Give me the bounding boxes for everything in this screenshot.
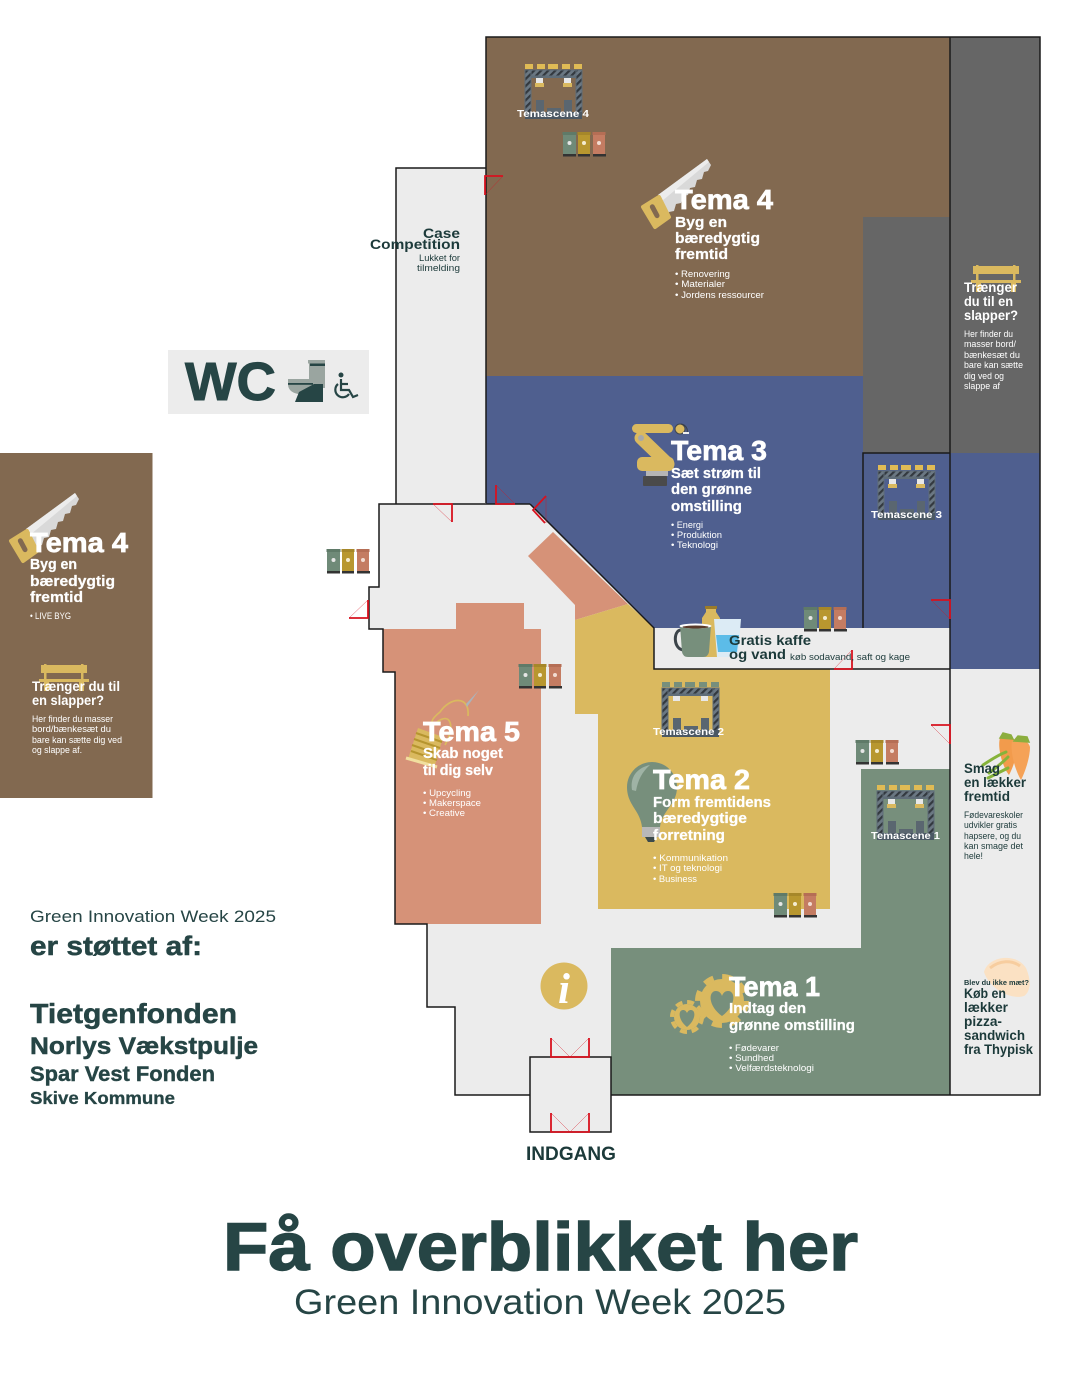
text block: sponsors <box>30 907 276 1108</box>
text block: case competition: Lukket for <box>419 253 460 263</box>
text block: tema 3: Tema 3 <box>671 435 767 466</box>
stage: temascene 3 <box>871 465 942 521</box>
doors <box>349 176 950 1132</box>
text block: tema 4: Tema 4 <box>675 184 773 215</box>
text block: pizza: pizza- <box>964 1014 1002 1029</box>
subtitle: Green Innovation Week 2025 <box>294 1283 786 1322</box>
text block: tema 2: bæredygtige <box>653 810 747 827</box>
text block: rest area right <box>964 280 1023 391</box>
text block: sponsors: Norlys Vækstpulje <box>30 1033 258 1060</box>
stage: temascene 4 <box>517 64 589 120</box>
text block: rest area side: Trænger du til <box>32 679 120 694</box>
icon: info circle <box>540 962 588 1013</box>
text block: free coffee <box>729 633 910 663</box>
icon: waste bins tema 2 <box>774 893 817 918</box>
text block: tema 5: Tema 5 <box>423 716 520 747</box>
text block: tema 2: Form fremtidens <box>653 794 771 811</box>
text block: tema 4 side: Tema 4 <box>30 527 128 558</box>
text block: rest area right: Trænger <box>964 280 1018 295</box>
text block: free coffee: køb sodavand, saft og kage <box>790 652 910 663</box>
text block: sponsors: Spar Vest Fonden <box>30 1063 215 1086</box>
text block: tema 1: • Sundhed <box>729 1053 774 1064</box>
text block: taste: Smag <box>964 761 1000 776</box>
text block: taste <box>964 761 1027 861</box>
text block: rest area right: bænkesæt du <box>964 350 1020 360</box>
panel: hall and corridors <box>369 168 1040 1132</box>
icon: gears with hearts <box>672 977 746 1032</box>
icon: robot arm <box>632 424 689 486</box>
text block: tema 4: • Materialer <box>675 279 725 290</box>
text block: taste: hele! <box>964 851 983 861</box>
text block: case competition: Case <box>423 226 461 241</box>
building walls <box>369 37 1040 1132</box>
panel: tema 5 diagonal extension <box>528 532 628 620</box>
stage: temascene 4: Temascene 4 <box>517 108 589 120</box>
text block: pizza: Blev du ikke mæt? <box>964 978 1029 987</box>
text block: tema 4 side: bæredygtig <box>30 573 115 590</box>
text block: rest area side: og slappe af. <box>32 745 82 755</box>
panel: grey rest area <box>863 37 1040 453</box>
text block: tema 2: • Kommunikation <box>653 853 728 864</box>
text block: tema 4: • Renovering <box>675 269 730 280</box>
text block: tema 4: • Jordens ressourcer <box>675 290 764 301</box>
text block: free coffee: Gratis kaffe <box>729 633 812 648</box>
text block: tema 5: • Makerspace <box>423 798 481 809</box>
text block: case competition <box>370 226 461 273</box>
icon: saw <box>643 159 711 227</box>
text block: tema 4: Byg en <box>675 214 727 231</box>
stage: temascene 1: Temascene 1 <box>871 830 940 842</box>
text block: rest area right: du til en <box>964 294 1013 309</box>
text block: rest area right: slapper? <box>964 308 1018 323</box>
text block: pizza: fra Thypisk <box>964 1042 1033 1057</box>
icon: waste bins outside <box>326 549 370 574</box>
panel: WC sign: WC <box>185 352 276 412</box>
text block: tema 3: • Teknologi <box>671 540 718 551</box>
icon: waste bins hall <box>856 740 899 764</box>
icon: thread spool and needle <box>406 690 479 767</box>
text block: tema 2: Tema 2 <box>653 764 750 795</box>
text block: case competition: Competition <box>370 237 460 252</box>
icon: coffee mug, bottle and water glass <box>675 606 741 657</box>
icon: waste bins coffee <box>804 607 847 632</box>
text block: tema 4 side: Byg en <box>30 556 77 573</box>
text block: taste: hapsere, og du <box>964 831 1021 841</box>
icon: wheelchair <box>335 372 358 397</box>
text block: tema 4: bæredygtig <box>675 230 760 247</box>
text block: pizza: Køb en <box>964 986 1006 1001</box>
text block: pizza <box>964 978 1033 1057</box>
icon: bench right <box>971 265 1021 292</box>
panel: tema 4 side card <box>0 453 152 798</box>
text block: tema 4 side: • LIVE BYG <box>30 611 71 621</box>
text block: tema 5: • Upcycling <box>423 788 471 799</box>
icon: bench side <box>39 664 89 691</box>
panel: tema 3 zone <box>486 376 1040 669</box>
text block: tema 1 <box>729 971 855 1074</box>
title: Få overblikket her <box>223 1209 858 1285</box>
text block: taste: udvikler gratis <box>964 820 1017 830</box>
text block: case competition: tilmelding <box>417 263 460 273</box>
text block: tema 2: • Business <box>653 874 697 885</box>
text block: rest area right: slappe af <box>964 381 1000 391</box>
stage: temascene 2 <box>653 682 724 738</box>
text block: rest area right: dig ved og <box>964 371 1004 381</box>
text block: taste: Fødevareskoler <box>964 810 1023 820</box>
stage: temascene 1 <box>871 785 940 842</box>
text block: rest area side <box>32 679 122 755</box>
icon: waste bins tema 5 <box>518 664 562 688</box>
panel: tema 2 zone <box>575 604 830 909</box>
text block: tema 5: • Creative <box>423 808 465 819</box>
text block: sponsors: Green Innovation Week 2025 <box>30 907 276 926</box>
icon: pizza sandwich <box>984 958 1030 997</box>
text block: taste: kan smage det <box>964 841 1023 851</box>
text block: tema 3: Sæt strøm til <box>671 465 761 482</box>
icon: waste bins near temascene 4 <box>562 132 606 156</box>
icon: info circle: i <box>558 966 570 1013</box>
text block: rest area side: bord/bænkesæt du <box>32 724 111 734</box>
text block: tema 2: forretning <box>653 827 725 844</box>
text block: tema 1: Tema 1 <box>729 971 820 1002</box>
entrance label: INDGANG <box>526 1144 616 1165</box>
text block: tema 4 <box>675 184 773 301</box>
text block: sponsors: Tietgenfonden <box>30 998 237 1029</box>
text block: rest area right: bare kan sætte <box>964 360 1023 370</box>
text block: rest area side: en slapper? <box>32 693 104 708</box>
icon: toilet <box>288 360 325 402</box>
icon: saw side <box>11 493 79 561</box>
text block: rest area right: Her finder du <box>964 329 1013 339</box>
text block: taste: en lækker <box>964 775 1027 790</box>
text block: sponsors: Skive Kommune <box>30 1088 175 1108</box>
icon: carrots <box>983 733 1030 780</box>
text block: tema 4 side: fremtid <box>30 589 83 606</box>
panel: tema 4 zone <box>486 37 950 376</box>
text block: tema 1: • Fødevarer <box>729 1043 779 1054</box>
icon: light bulb <box>627 762 677 842</box>
text block: tema 1: Indtag den <box>729 1000 806 1017</box>
text block: tema 3: den grønne <box>671 481 752 498</box>
text block: tema 4 side <box>30 527 128 621</box>
text block: tema 2 <box>653 764 771 885</box>
text block: pizza: sandwich <box>964 1028 1025 1043</box>
text block: rest area side: bare kan sætte dig ved <box>32 735 122 745</box>
text block: tema 3: • Produktion <box>671 530 722 541</box>
text block: taste: fremtid <box>964 789 1010 804</box>
text block: tema 3: omstilling <box>671 498 742 515</box>
text block: tema 5 <box>423 716 520 819</box>
text block: rest area right: masser bord/ <box>964 339 1016 349</box>
stage: temascene 2: Temascene 2 <box>653 726 724 738</box>
text block: tema 3 <box>671 435 767 551</box>
text block: tema 4: fremtid <box>675 246 728 263</box>
panel: tema 1 zone <box>611 769 950 1095</box>
text block: pizza: lækker <box>964 1000 1009 1015</box>
text block: tema 2: • IT og teknologi <box>653 863 722 874</box>
text block: tema 1: grønne omstilling <box>729 1017 855 1034</box>
stage: temascene 3: Temascene 3 <box>871 509 942 521</box>
text block: tema 5: Skab noget <box>423 745 503 762</box>
panel: WC sign <box>168 350 369 414</box>
panel: tema 5 zone <box>383 603 541 924</box>
text block: free coffee: og vand <box>729 647 786 662</box>
text block: tema 5: til dig selv <box>423 762 494 779</box>
text block: rest area side: Her finder du masser <box>32 714 113 724</box>
text block: sponsors: er støttet af: <box>30 931 202 961</box>
text block: tema 3: • Energi <box>671 520 703 531</box>
text block: tema 1: • Velfærdsteknologi <box>729 1063 814 1074</box>
